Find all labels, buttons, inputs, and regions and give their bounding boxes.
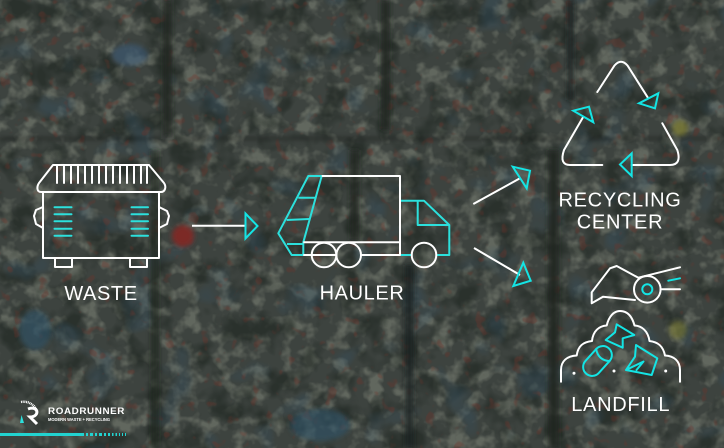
panel: recycling center	[558, 62, 682, 233]
label: recycling center: RECYCLING	[558, 190, 682, 212]
arrow: hauler to landfill	[474, 248, 531, 286]
icon: bulldozer	[592, 266, 680, 303]
panel: landfill	[561, 266, 680, 416]
tagline: MODERN WASTE + RECYCLING	[48, 417, 111, 422]
icon: garbage truck	[278, 176, 449, 267]
panel: hauler	[278, 176, 449, 304]
icon: dumpster	[34, 165, 169, 267]
logo: roadrunner	[0, 402, 126, 436]
wordmark: ROADRUNNER	[48, 406, 125, 416]
icon: roadrunner R mark	[20, 402, 37, 424]
label: hauler: HAULER	[320, 282, 404, 304]
teal footer bar	[0, 433, 126, 436]
label: landfill: LANDFILL	[571, 394, 670, 416]
label: waste: WASTE	[64, 283, 138, 305]
arrow: waste to hauler	[192, 214, 258, 238]
panel: waste	[34, 165, 169, 305]
label: recycling center: CENTER	[577, 211, 663, 233]
icon: landfill mound	[561, 311, 680, 382]
arrow: hauler to recycling center	[473, 167, 530, 204]
icon: recycling triangle	[562, 62, 679, 176]
